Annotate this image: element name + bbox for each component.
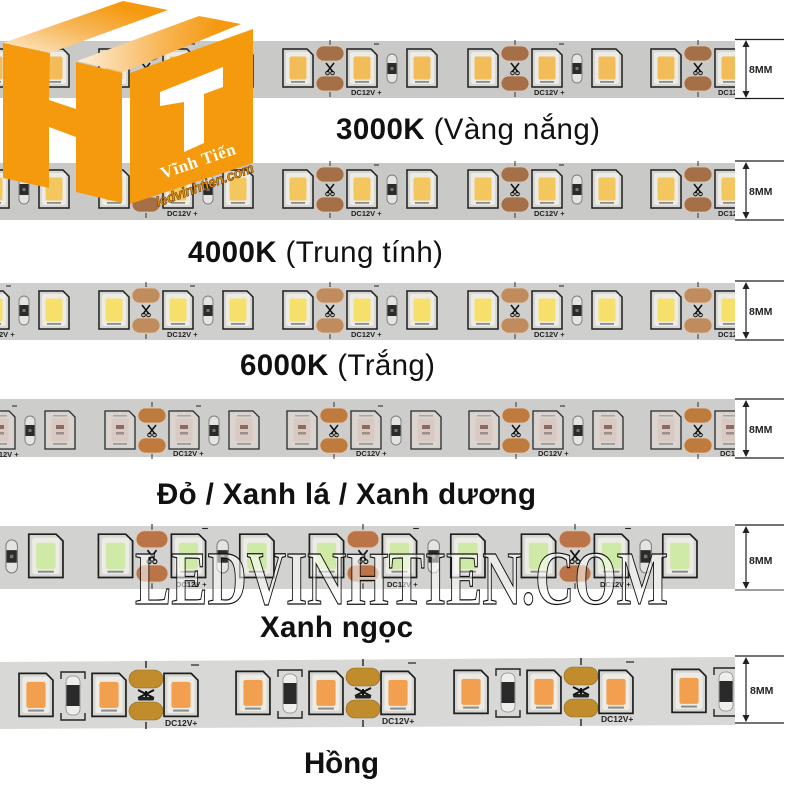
LED strip: 6000K: DC12V + xyxy=(718,330,749,339)
dimension: 8MM strip 5 xyxy=(735,525,784,590)
dimension: 8MM strip 2 xyxy=(735,161,784,220)
dimension: 8MM strip 2: 8MM xyxy=(749,186,773,198)
LED strip: turquoise: DC12V + xyxy=(387,580,418,589)
heading: 4000K: 4000K (Trung tính) xyxy=(188,236,443,269)
LED strip: 3000K: DC12V + xyxy=(718,88,749,97)
logo: ledvinhtien.com: ledvinhtien.com xyxy=(154,160,256,210)
LED strip: red / green / blue: DC12V + xyxy=(720,449,751,458)
LED strip: turquoise xyxy=(0,524,735,589)
LED strip: pink: DC12V+ xyxy=(382,716,414,726)
dimension: 8MM strip 4 xyxy=(735,399,784,458)
LED strip: pink: DC12V+ xyxy=(601,714,633,724)
logo: box top flap right xyxy=(77,16,241,72)
LED strip: 4000K: DC12V + xyxy=(167,209,198,218)
LED strip: 3000K xyxy=(0,40,800,98)
heading: 3000K: 3000K (Vàng nắng) xyxy=(336,113,600,146)
LED strip: turquoise: DC12V + xyxy=(600,580,631,589)
LED strip: 6000K: DC12V + xyxy=(167,330,198,339)
heading: red green blue: Đỏ / Xanh lá / Xanh dương xyxy=(157,478,536,511)
LED strip: pink: DC12V+ xyxy=(165,718,197,728)
LED strip: pink xyxy=(0,657,800,729)
dimension: 8MM strip 4: 8MM xyxy=(749,424,773,436)
LED strip: 6000K: DC12V + xyxy=(534,330,565,339)
dimension: 8MM strip 3: 8MM xyxy=(749,306,773,318)
LED strip: red / green / blue: DC12V + xyxy=(356,449,387,458)
LED strip: turquoise: DC12V + xyxy=(176,580,207,589)
heading: pink: Hồng xyxy=(304,747,379,780)
LED strip: 3000K: DC12V + xyxy=(351,88,382,97)
dimension: 8MM strip 6: 8MM xyxy=(750,685,774,697)
heading: turquoise: Xanh ngọc xyxy=(260,611,413,644)
logo: HT box Vĩnh Tiến xyxy=(3,1,256,210)
LED strip: red / green / blue: DC12V + xyxy=(538,449,569,458)
logo: letter H xyxy=(3,43,122,203)
LED strip: 4000K: DC12V + xyxy=(534,209,565,218)
LED strip: red / green / blue: DC12V + xyxy=(173,449,204,458)
logo: box top flap left xyxy=(3,1,168,53)
dimension: 8MM strip 5: 8MM xyxy=(749,555,773,567)
dimension: 8MM strip 3 xyxy=(735,281,784,340)
LED strip: 4000K xyxy=(0,161,800,220)
dimension: 8MM strip 1: 8MM xyxy=(749,64,773,76)
heading: 6000K: 6000K (Trắng) xyxy=(240,349,435,382)
LED strip: red / green / blue xyxy=(0,399,800,459)
LED strip: 4000K: DC12V + xyxy=(351,209,382,218)
dimension: 8MM strip 1 xyxy=(735,40,784,98)
LED strip: 3000K: DC12V + xyxy=(534,88,565,97)
LED strip: 4000K: DC12V + xyxy=(718,209,749,218)
LED strip: 6000K: DC12V + xyxy=(351,330,382,339)
logo: box front face xyxy=(130,29,253,204)
logo: Vĩnh Tiến: Vĩnh Tiến xyxy=(158,139,239,183)
LED strip: 6000K xyxy=(0,282,800,340)
logo: letter T xyxy=(160,67,223,152)
dimension: 8MM strip 6 xyxy=(735,656,784,723)
